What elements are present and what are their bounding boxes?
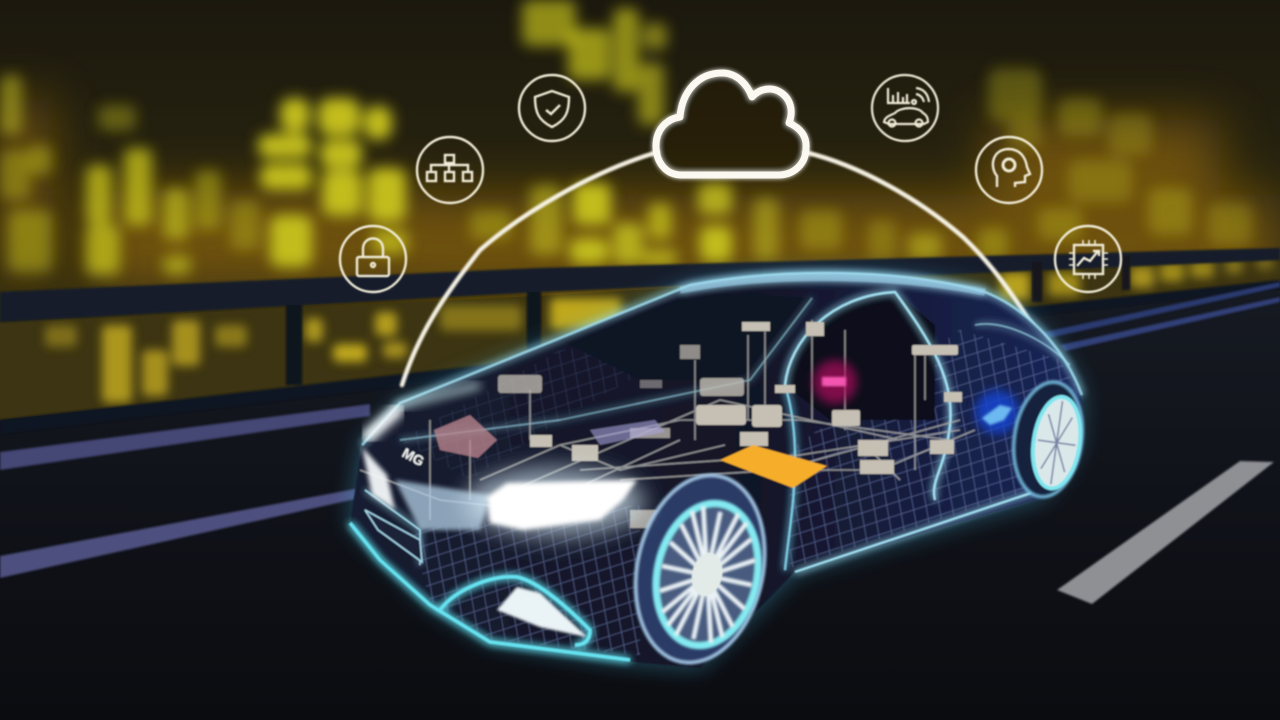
- guard rail: [0, 248, 1280, 434]
- icon: connected car data: [872, 75, 938, 141]
- electronic control units and wiring: [360, 320, 975, 528]
- front grille and bumper glow: [362, 447, 395, 510]
- battery pack: [720, 445, 827, 488]
- icon: AI head with gear: [976, 137, 1042, 203]
- cloud icon: [656, 73, 806, 175]
- magenta indicator: [813, 360, 857, 404]
- front wheel: [619, 463, 781, 675]
- icon: padlock: [340, 226, 406, 292]
- blue indicator: [975, 390, 1019, 434]
- icon: network hierarchy: [417, 137, 483, 203]
- car outline: [350, 273, 1082, 660]
- blurred city skyline: [0, 0, 1280, 295]
- road surface: [0, 280, 1280, 720]
- icon: chip with trend: [1055, 226, 1121, 292]
- icon: security shield: [519, 75, 585, 141]
- dome arc connecting car to cloud: [402, 152, 1032, 385]
- engine block: [434, 415, 497, 458]
- rear wheel: [1006, 377, 1090, 502]
- car: [350, 273, 1090, 675]
- lit windows beneath guard rail: [0, 250, 1280, 420]
- car glow halo: [350, 273, 1082, 668]
- headlight: [368, 385, 645, 536]
- car body: [350, 273, 1082, 668]
- windows: [560, 292, 935, 420]
- lower grille: [365, 510, 422, 562]
- wireframe mesh: [400, 330, 1075, 655]
- fog lamp: [497, 587, 587, 637]
- road lane markings: [0, 282, 1280, 604]
- brand badge: MG: [400, 445, 427, 469]
